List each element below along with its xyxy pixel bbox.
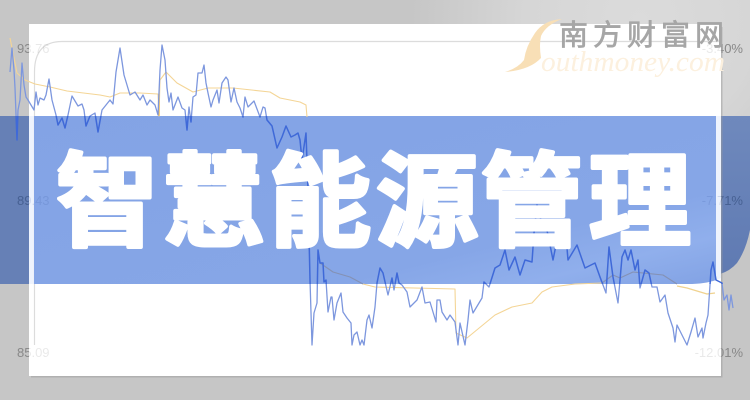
axis labels right: -12.01%	[695, 345, 743, 360]
faint axis labels showing through card: -7.71%	[702, 193, 743, 208]
chart frame	[34, 42, 721, 345]
faint axis labels showing through card: -3.40%	[702, 41, 743, 56]
moving cost line	[10, 38, 715, 338]
dark band right of card	[720, 116, 750, 274]
main blue band	[34, 116, 716, 284]
title: 智慧能源管理	[56, 146, 691, 260]
faint axis labels showing through card: 85.09	[17, 345, 50, 360]
axis labels right: -7.71%	[702, 193, 743, 208]
watermark swoosh	[505, 19, 562, 72]
axis labels left: 93.76	[17, 41, 50, 56]
faint axis labels showing through card: 93.76	[17, 41, 50, 56]
top-right background glow	[400, 0, 750, 260]
faint axis labels showing through card: -12.01%	[695, 345, 743, 360]
axis labels right: -3.40%	[702, 41, 743, 56]
price line chart	[10, 45, 733, 345]
axis labels left: 89.43	[17, 193, 50, 208]
watermark	[505, 19, 725, 78]
watermark Chinese name: 南方财富网	[559, 19, 724, 52]
dark band left of card	[0, 116, 30, 284]
card band side strips	[29, 116, 721, 284]
axis labels right	[695, 41, 743, 360]
faint axis labels showing through card: 89.43	[17, 193, 50, 208]
axis labels left: 85.09	[17, 345, 50, 360]
axis labels left	[17, 41, 50, 360]
watermark domain: outhmoney.com	[541, 46, 725, 78]
faint axis labels showing through card	[17, 41, 743, 360]
